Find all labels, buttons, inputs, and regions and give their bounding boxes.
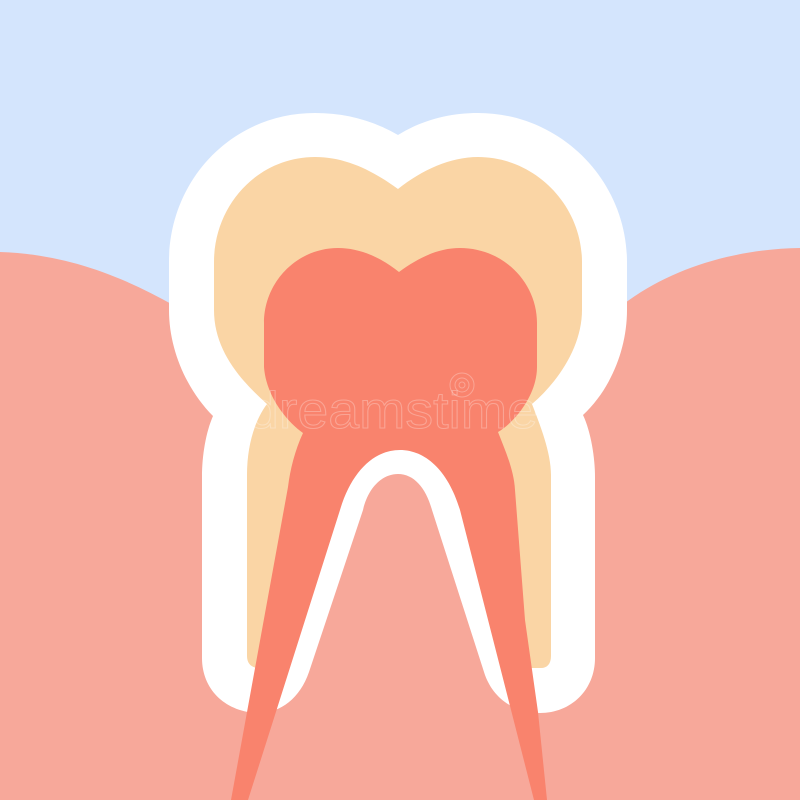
gums [0, 248, 800, 800]
watermark spiral logo [450, 373, 474, 397]
tooth enamel outline [169, 113, 627, 713]
watermark [248, 373, 538, 440]
dentin layer [214, 157, 582, 668]
tooth illustration [169, 113, 627, 800]
pulp and roots [231, 248, 547, 800]
watermark text: dreamstime [248, 382, 538, 440]
